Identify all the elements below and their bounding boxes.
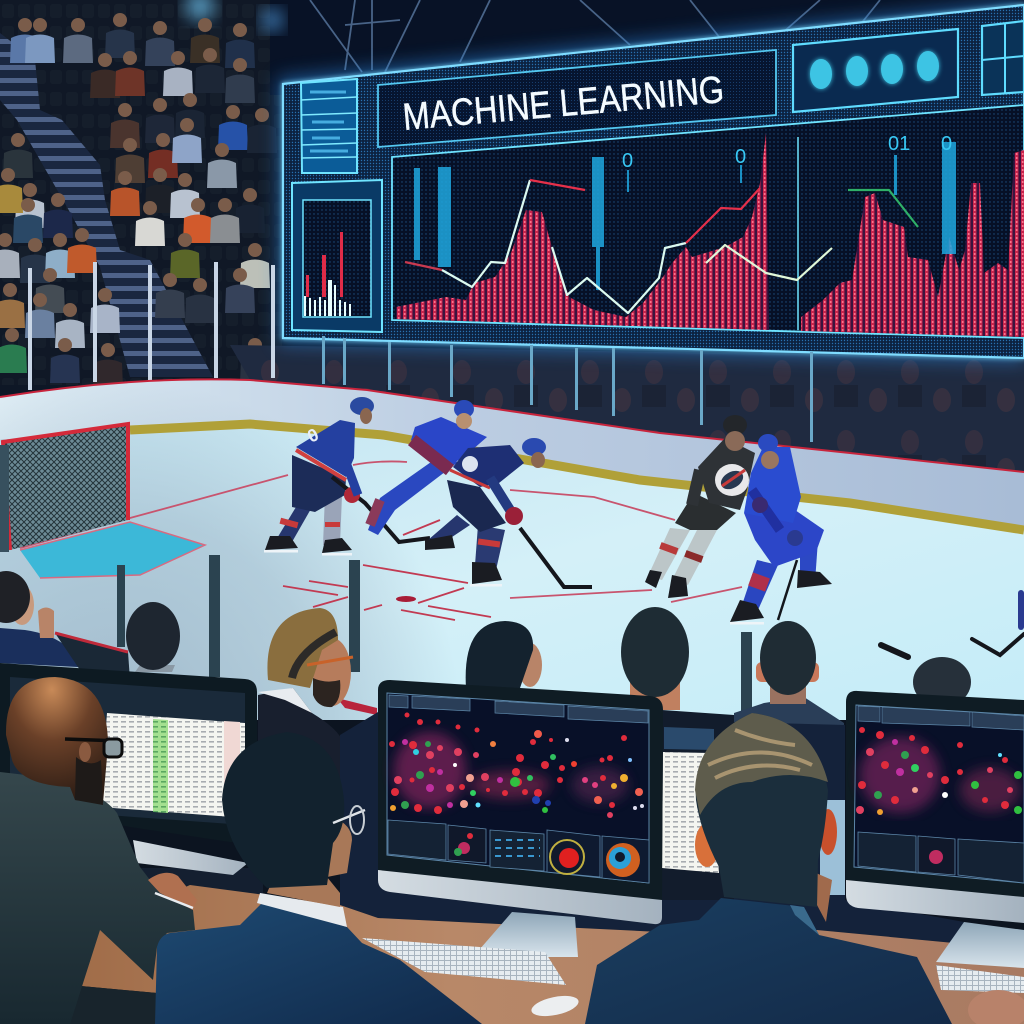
monitor bezel: [378, 680, 663, 900]
screen digits: 0: [622, 150, 633, 172]
right monitor: [846, 691, 1024, 923]
player 3: [425, 438, 592, 587]
divider: [797, 137, 799, 330]
red bar area chart: [396, 133, 1024, 337]
analyst with black hair and glasses: [155, 732, 482, 1024]
monitor chin: [378, 868, 662, 924]
crowd in the stands: [0, 13, 277, 388]
bottom dashboard panels: [388, 820, 649, 883]
analyst in grey suit: [734, 621, 844, 800]
analyst far right head: [913, 657, 971, 707]
screen digits: [622, 133, 952, 172]
panel: small bar chart: [292, 180, 382, 332]
analyst dark hair with red barrier: [55, 602, 180, 680]
toolbar right: [858, 706, 1024, 730]
analyst center back: [621, 607, 689, 710]
keyboards and mouse: [362, 938, 1024, 1020]
rink boards: [0, 379, 1024, 530]
left monitor with spreadsheet: [0, 663, 257, 875]
screen digits: 01: [888, 133, 910, 155]
back monitor with spreadsheet: [662, 710, 734, 900]
bottom panels right: [858, 832, 1024, 883]
screen digits: 0: [941, 133, 952, 155]
player 1: 0: [304, 424, 322, 447]
analyst from behind with brown hair: [585, 713, 952, 1024]
analyst with blond hair: [258, 608, 377, 830]
panel: far right grid: [982, 21, 1024, 95]
screen frame: [283, 5, 1024, 358]
center monitor: [378, 680, 663, 924]
panel: data rows: [301, 79, 357, 173]
scatter plot: [389, 712, 644, 818]
scatter glow: [394, 732, 628, 808]
center monitor stand: [473, 912, 578, 957]
monitor screen: [387, 693, 649, 883]
support struts: [322, 336, 813, 442]
foreground glass posts: [117, 555, 752, 714]
desk: [65, 885, 1024, 1024]
player 2: [368, 400, 487, 535]
rink ice: [0, 380, 1024, 720]
analyst bald with glasses: [0, 677, 197, 1024]
stairs in the stands: [0, 33, 213, 377]
glass posts: [28, 262, 275, 390]
screen halo: [278, 0, 1024, 362]
ice markings: [20, 461, 742, 620]
panel: indicator lights: [793, 29, 958, 112]
loose sticks: [881, 590, 1024, 657]
screen digits: 0: [735, 146, 746, 168]
lower crowd behind glass: [230, 345, 1024, 472]
right monitor stand: [936, 922, 1024, 968]
control room back wall: [133, 712, 964, 943]
gauge red: [550, 840, 584, 874]
hockey goal: [0, 424, 128, 552]
main chart panel: [392, 105, 1024, 338]
trend line: [405, 180, 918, 313]
player 5: [730, 434, 832, 624]
player 1: [264, 397, 430, 556]
stadium background: [0, 0, 1024, 400]
blue data columns: [414, 142, 956, 290]
analyst woman: [466, 621, 542, 688]
player 4: [645, 415, 755, 598]
toolbar: [389, 695, 648, 723]
goal crease: [20, 522, 205, 578]
gauge blue: [606, 843, 640, 877]
hand at lower right: [968, 990, 1024, 1024]
title: MACHINE LEARNING: [401, 69, 726, 139]
big analytics screen: [278, 0, 1024, 442]
analyst top left: [0, 571, 78, 667]
scatter glow right: [860, 737, 1020, 813]
scatter plot right: [856, 727, 1022, 815]
title panel: [378, 50, 776, 147]
